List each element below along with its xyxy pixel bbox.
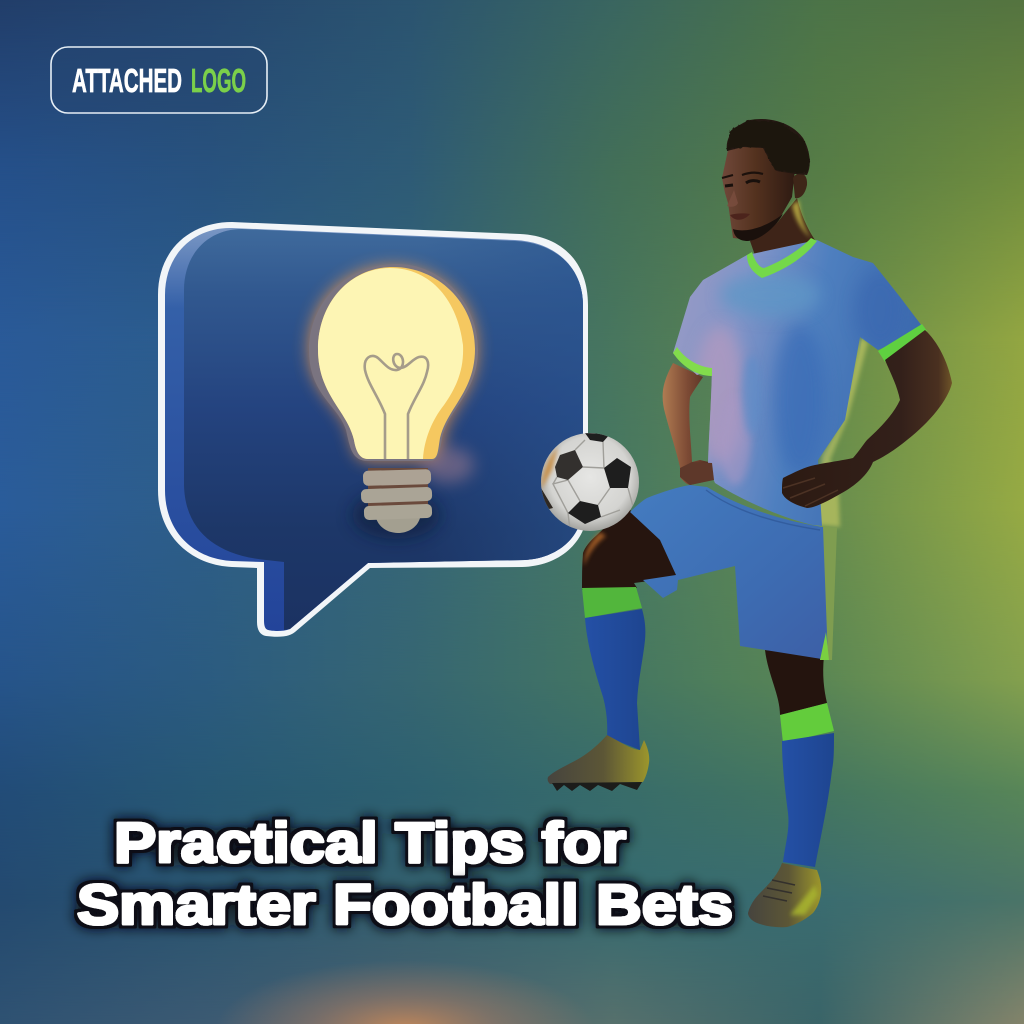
shorts accent bbox=[820, 632, 829, 660]
standing leg bbox=[748, 650, 834, 927]
raised leg bbox=[548, 510, 680, 791]
title line 1: Practical Tips for bbox=[114, 811, 626, 875]
eyes bbox=[725, 181, 760, 186]
logo text logo: LOGO bbox=[191, 62, 246, 99]
logo text attached: ATTACHED bbox=[72, 62, 182, 99]
olive side stripe bbox=[820, 526, 837, 660]
neck rim light bbox=[792, 200, 811, 238]
thigh bbox=[765, 650, 827, 715]
football player bbox=[539, 119, 952, 927]
bulb amber edge bbox=[318, 267, 475, 459]
right sleeve cuff bbox=[878, 324, 927, 362]
face bbox=[722, 147, 795, 240]
base neck bbox=[368, 468, 428, 516]
green sock band bbox=[780, 703, 834, 743]
collar bbox=[747, 238, 817, 278]
ball highlight bbox=[541, 447, 558, 490]
head bbox=[722, 119, 810, 241]
light bulb bbox=[309, 264, 478, 539]
shirt body bbox=[673, 240, 925, 526]
raised boot bbox=[548, 735, 649, 784]
studs bbox=[552, 782, 642, 791]
hair curls bbox=[727, 120, 810, 173]
left sleeve cuff bbox=[673, 347, 712, 376]
bulb outer rim bbox=[309, 264, 478, 461]
bulb glow bbox=[309, 266, 477, 461]
pink shading bbox=[694, 325, 746, 465]
speech bubble with light bulb bbox=[158, 222, 588, 637]
hair solid bbox=[727, 119, 810, 175]
olive side panel bbox=[815, 337, 868, 527]
seams bbox=[553, 440, 634, 530]
ear bbox=[793, 173, 807, 198]
green band bbox=[582, 587, 642, 618]
sock bbox=[782, 733, 834, 867]
hands bbox=[680, 462, 838, 506]
nose bbox=[727, 190, 738, 207]
base glow bbox=[422, 447, 474, 483]
eyebrows bbox=[722, 173, 763, 178]
shorts body bbox=[630, 485, 828, 660]
bubble shape bbox=[158, 222, 588, 637]
right arm bbox=[782, 330, 952, 508]
knee highlight bbox=[584, 532, 606, 566]
boot bbox=[748, 863, 821, 927]
base shadow bbox=[352, 491, 440, 539]
shorts folds bbox=[706, 490, 820, 530]
left arm bbox=[663, 363, 713, 485]
shorts bbox=[630, 485, 837, 660]
right hand fingers bbox=[783, 478, 838, 506]
boot laces bbox=[763, 880, 795, 901]
boot lime flash bbox=[790, 885, 818, 915]
bulb screw base bbox=[352, 468, 440, 539]
title line 2: Smarter Football Bets bbox=[77, 873, 733, 937]
logo badge bbox=[51, 47, 267, 113]
title bbox=[77, 811, 733, 937]
soccer ball bbox=[539, 433, 639, 531]
raised sock bbox=[585, 609, 645, 750]
raised thigh bbox=[582, 510, 680, 590]
beard bbox=[733, 214, 783, 241]
bulb body bbox=[318, 268, 463, 459]
neck bbox=[750, 198, 815, 278]
filament bbox=[365, 354, 428, 459]
pentagons bbox=[555, 450, 583, 480]
left hand bbox=[680, 462, 714, 485]
lips bbox=[730, 213, 750, 220]
shirt bbox=[673, 238, 927, 527]
